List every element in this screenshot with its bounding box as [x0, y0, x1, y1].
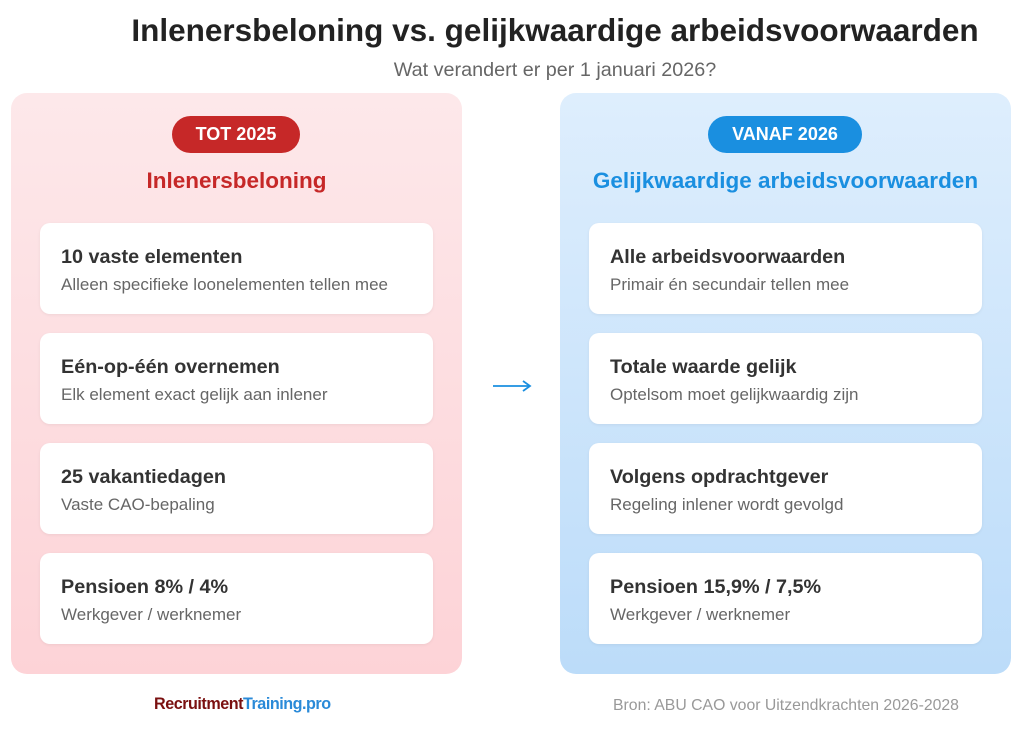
card: een-op-een: Eén-op-één overnemen: [61, 356, 280, 378]
card: opdrachtgever: [589, 443, 982, 534]
pill: vanaf 2026: VANAF 2026: [732, 124, 838, 144]
pill: tot 2025: TOT 2025: [196, 124, 276, 144]
logo: RecruitmentTraining.pro: [154, 694, 331, 713]
source: Bron: ABU CAO voor Uitzendkrachten 2026-2028: [613, 697, 959, 714]
card: opdrachtgever: Volgens opdrachtgever: [610, 466, 828, 488]
card: pensioen: Werkgever / werknemer: [610, 605, 790, 624]
card: vakantiedagen: 25 vakantiedagen: [61, 466, 226, 488]
subtitle: Wat verandert er per 1 januari 2026?: [394, 59, 716, 81]
card: vakantiedagen: Vaste CAO-bepaling: [61, 495, 215, 514]
card: 10 vaste elementen: Alleen specifieke loonelementen tellen mee: [61, 275, 388, 294]
title: Inlenersbeloning vs. gelijkwaardige arbeidsvoorwaarden: [131, 12, 979, 48]
card: 10 vaste elementen: 10 vaste elementen: [61, 246, 242, 268]
panel: tot 2025: [11, 93, 462, 674]
card: alle: [589, 223, 982, 314]
card: pensioen: Pensioen 8% / 4%: [61, 576, 228, 598]
card: 10 vaste elementen: [40, 223, 433, 314]
card: opdrachtgever: Regeling inlener wordt gevolgd: [610, 495, 843, 514]
arrow: [493, 380, 532, 392]
heading: inlenersbeloning: Inlenersbeloning: [146, 168, 327, 193]
card: een-op-een: Elk element exact gelijk aan inlener: [61, 385, 327, 404]
heading: gelijkwaardige: Gelijkwaardige arbeidsvoorwaarden: [593, 168, 978, 193]
card: pensioen: Werkgever / werknemer: [61, 605, 241, 624]
card: pensioen: [589, 553, 982, 644]
card: totale waarde: Optelsom moet gelijkwaardig zijn: [610, 385, 858, 404]
card: totale waarde: [589, 333, 982, 424]
pill: tot 2025: [172, 116, 300, 153]
card: totale waarde: Totale waarde gelijk: [610, 356, 797, 378]
card: pensioen: [40, 553, 433, 644]
card: een-op-een: [40, 333, 433, 424]
pill: vanaf 2026: [708, 116, 862, 153]
card: vakantiedagen: [40, 443, 433, 534]
panel: vanaf 2026: [560, 93, 1011, 674]
card: pensioen: Pensioen 15,9% / 7,5%: [610, 576, 821, 598]
card: alle: Primair én secundair tellen mee: [610, 275, 849, 294]
card: alle: Alle arbeidsvoorwaarden: [610, 246, 845, 268]
